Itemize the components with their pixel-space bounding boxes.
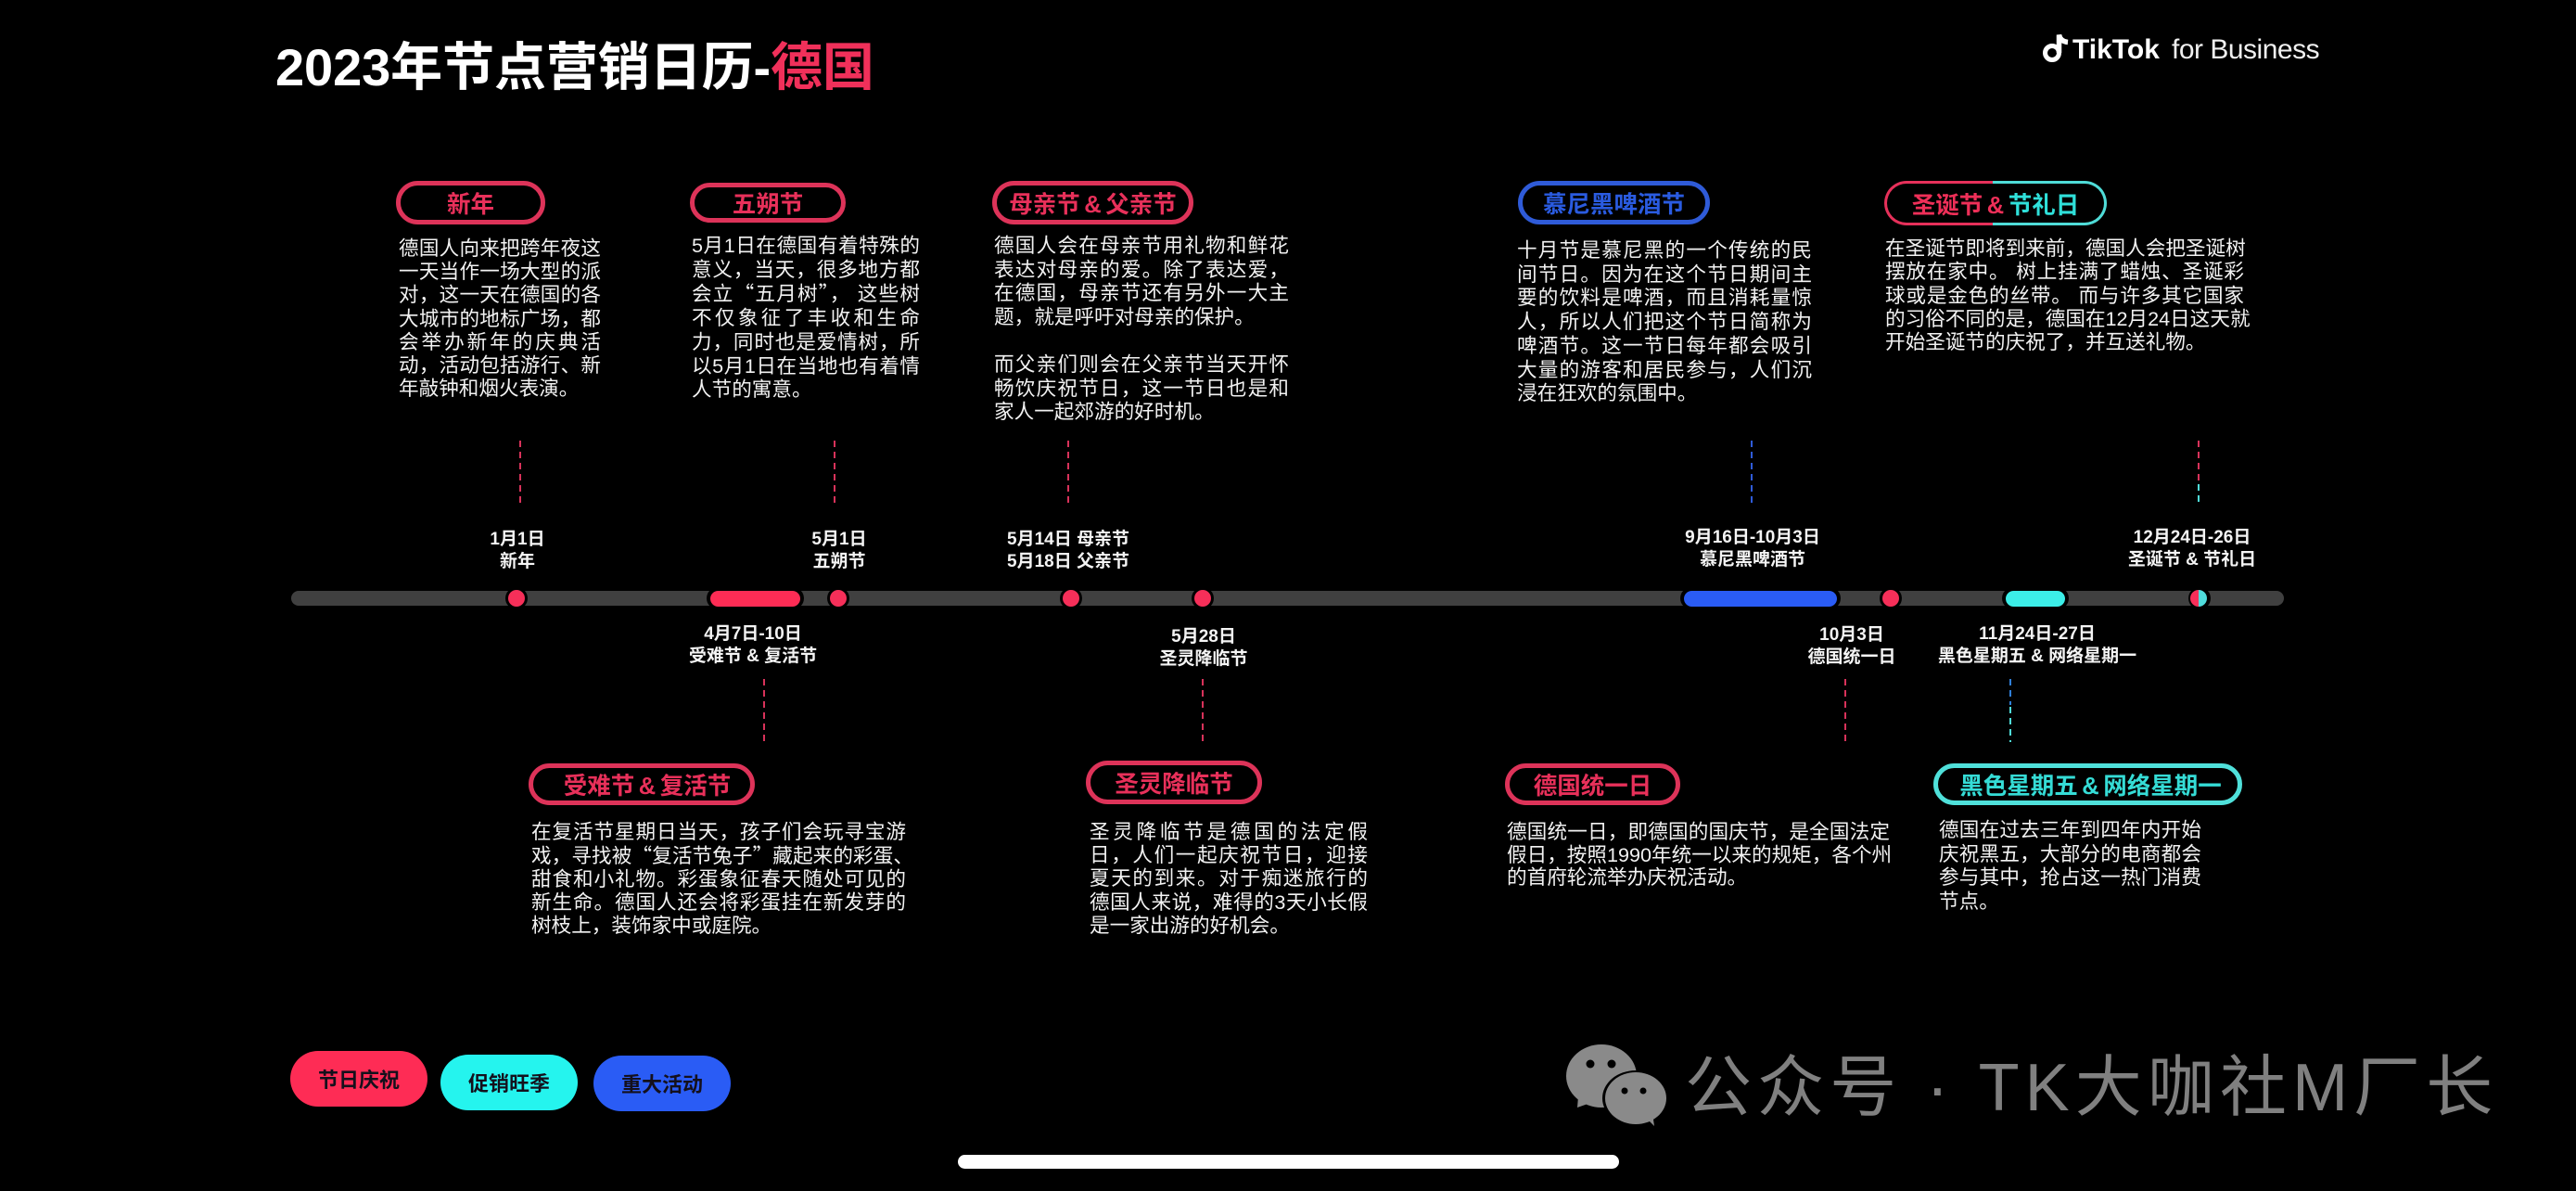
badge: 黑色星期五 & 网络星期一 [1933, 763, 2242, 805]
text: 五朔节 description: 5月1日在德国有着特殊的 [692, 234, 920, 257]
date label: 慕尼黑啤酒节 [1685, 528, 1820, 570]
connector: 德国统一日 [1844, 679, 1846, 742]
badge: 圣灵降临节: 圣灵降临节 [1115, 772, 1233, 798]
badge: 德国统一日: 德国统一日 [1534, 774, 1651, 800]
text: 母亲节 description: 在德国，母亲节还有另外一大主 [994, 281, 1289, 304]
connector: 五朔节 [834, 441, 835, 503]
legend: 促销旺季 [440, 1055, 578, 1110]
text: 圣灵降临节 description: 是一家出游的好机会。 [1090, 914, 1290, 937]
marker: 圣灵降临节 [1192, 587, 1214, 609]
text: 新年 description: 年敲钟和烟火表演。 [399, 377, 579, 400]
date label: 五朔节: 五朔节 [812, 552, 866, 571]
legend: 重大活动: 重大活动 [621, 1073, 703, 1096]
text: 圣灵降临节 description: 德国人来说，难得的3天小长假 [1090, 890, 1368, 914]
badge: 新年 [396, 181, 545, 224]
text: 慕尼黑啤酒节 description: 间节日。因为在这个节日期间主 [1517, 263, 1812, 286]
date label: 受难节 & 复活节 [689, 624, 817, 666]
date label: 圣诞节 & 节礼日: 12月24日-26日 [2134, 528, 2251, 547]
text: 新年 description [399, 237, 601, 400]
date label: 黑色星期五 & 网络星期一: 黑色星期五 & 网络星期一 [1938, 647, 2136, 666]
legend: 节日庆祝 [290, 1051, 427, 1107]
badge: 圣诞节 & 节礼日: 圣诞节 & [1912, 193, 2004, 219]
text: 五朔节 description: 力，同时也是爱情树，所 [692, 330, 920, 353]
text: 母亲节 description: 德国人会在母亲节用礼物和鲜花 [994, 234, 1289, 257]
text: 母亲节 description: 表达对母亲的爱。除了表达爱， [994, 258, 1289, 281]
legend: 促销旺季: 促销旺季 [468, 1072, 550, 1095]
badge: 新年: 新年 [447, 192, 494, 218]
badge: 慕尼黑啤酒节 [1518, 181, 1710, 224]
panel: 五朔节 [690, 183, 920, 401]
marker: 德国统一日 [1880, 587, 1902, 609]
legend [290, 1051, 731, 1111]
date label: 圣诞节 & 节礼日 [2128, 528, 2256, 570]
text: 圣诞节 description: 的习俗不同的是，德国在12月24日这天就 [1885, 307, 2251, 330]
badge: 慕尼黑啤酒节: 慕尼黑啤酒节 [1543, 192, 1685, 218]
panel: 德国统一日 [1505, 763, 1892, 889]
date label: 圣灵降临节: 圣灵降临节 [1159, 649, 1248, 669]
text: 母亲节 description: 题，就是呼吁对母亲的保护。 [994, 305, 1255, 328]
text: 德国统一日 description: 的首府轮流举办庆祝活动。 [1507, 865, 1747, 889]
panel: 慕尼黑啤酒节 [1517, 181, 1812, 404]
text: 圣诞节 description: 球或是金色的丝带。 而与许多其它国家 [1885, 284, 2244, 307]
text: 新年 description: 大城市的地标广场，都 [399, 307, 601, 330]
text: 慕尼黑啤酒节 description [1517, 238, 1812, 404]
connector: 黑色星期五 [2009, 679, 2011, 742]
text: 受难节 description [531, 820, 913, 937]
date label: 母亲节 & 父亲节: 5月18日 父亲节 [1007, 552, 1129, 571]
date label: 新年 [490, 530, 545, 571]
text: 德国统一日 description: 德国统一日，即德国的国庆节，是全国法定 [1507, 820, 1890, 843]
date label: 圣灵降临节: 5月28日 [1171, 627, 1236, 647]
marker: 黑色星期五 & 网络星期一 [2002, 587, 2069, 609]
text: 父亲节 description: 而父亲们则会在父亲节当天开怀 [994, 352, 1289, 376]
text: 圣诞节 description: 在圣诞节即将到来前，德国人会把圣诞树 [1885, 237, 2246, 260]
icon: WeChat bubbles [1566, 1044, 1666, 1126]
connector: 受难节 [763, 679, 765, 742]
date label: 德国统一日: 德国统一日 [1807, 647, 1896, 667]
date label: 新年: 1月1日 [490, 530, 545, 549]
date label: 黑色星期五 & 网络星期一 [1938, 624, 2136, 666]
text: 父亲节 description: 畅饮庆祝节日，这一节日也是和 [994, 377, 1289, 400]
text: 黑色星期五 description: 德国在过去三年到四年内开始 [1939, 818, 2201, 841]
panel: 母亲节 & 父亲节 [992, 181, 1289, 423]
timeline [291, 441, 2284, 742]
date label: 慕尼黑啤酒节: 9月16日-10月3日 [1685, 528, 1820, 547]
text: 德国统一日 description [1507, 820, 1892, 889]
text: 新年 description: 会举办新年的庆典活 [399, 330, 601, 353]
badge: 圣灵降临节 [1086, 761, 1262, 804]
text: 圣灵降临节 description: 日，人们一起庆祝节日，迎接 [1090, 843, 1368, 866]
text: 慕尼黑啤酒节 description: 啤酒节。这一节日每年都会吸引 [1517, 334, 1812, 357]
badge: 圣诞节 & 节礼日: 节礼日 [2009, 193, 2079, 219]
home indicator [958, 1155, 1619, 1169]
connector: 母亲节 [1067, 441, 1069, 503]
text: 新年 description: 一天当作一场大型的派 [399, 260, 601, 283]
text: 受难节 description: 甜食和小礼物。彩蛋象征春天随处可见的 [531, 867, 906, 890]
date label: 五朔节: 5月1日 [811, 530, 867, 549]
text: 黑色星期五 description: 参与其中，抢占这一热门消费 [1939, 865, 2201, 889]
connector: 圣灵降临节 [1202, 679, 1204, 742]
legend: 节日庆祝: 节日庆祝 [318, 1069, 400, 1092]
date label: 新年: 新年 [500, 552, 535, 571]
text: 母亲节 description [994, 234, 1289, 328]
text: 受难节 description: 戏，寻找被“复活节兔子”藏起来的彩蛋、 [531, 840, 913, 869]
text: 慕尼黑啤酒节 description: 大量的游客和居民参与，人们沉 [1517, 358, 1812, 381]
text: 慕尼黑啤酒节 description: 十月节是慕尼黑的一个传统的民 [1517, 238, 1812, 262]
text: 慕尼黑啤酒节 description: 人，所以人们把这个节日简称为 [1517, 310, 1812, 333]
date label: 母亲节 & 父亲节: 5月14日 母亲节 [1007, 530, 1129, 549]
text: 慕尼黑啤酒节 description: 浸在狂欢的氛围中。 [1517, 381, 1697, 404]
connector: 慕尼黑啤酒节 [1751, 441, 1753, 503]
panel: 圣灵降临节 [1086, 761, 1368, 937]
logo: TikTok for Business: for Business [2172, 34, 2319, 65]
date label: 德国统一日: 10月3日 [1819, 625, 1884, 645]
logo: TikTok for Business [2043, 34, 2319, 65]
date label: 德国统一日 [1807, 625, 1896, 667]
badge: 圣诞节 & 节礼日 [1884, 181, 2107, 225]
legend: 重大活动 [593, 1056, 731, 1111]
badge: 五朔节: 五朔节 [733, 192, 803, 218]
text: 五朔节 description: 意义，当天，很多地方都 [692, 258, 920, 281]
panel: 受难节 & 复活节 [529, 763, 913, 937]
text: 五朔节 description [692, 234, 920, 401]
text: 黑色星期五 description: 庆祝黑五，大部分的电商都会 [1939, 842, 2201, 865]
text: 父亲节 description [994, 352, 1289, 423]
date label: 圣灵降临节 [1159, 627, 1248, 669]
connector: 圣诞节 [2198, 441, 2200, 503]
panel: 新年 [396, 181, 601, 400]
date label: 五朔节 [811, 530, 867, 571]
text: 圣灵降临节 description: 夏天的到来。对于痴迷旅行的 [1090, 866, 1368, 890]
marker: 新年 [505, 587, 528, 609]
text: 五朔节 description: 人节的寓意。 [692, 378, 812, 401]
badge: 母亲节 & 父亲节 [992, 181, 1193, 224]
date label: 受难节 & 复活节: 受难节 & 复活节 [689, 647, 817, 666]
connector: 新年 [519, 441, 521, 503]
text: 父亲节 description: 家人一起郊游的好时机。 [994, 400, 1215, 423]
badge: 五朔节 [690, 183, 846, 223]
text: 德国统一日 description: 假日，按照1990年统一以来的规矩，各个州 [1507, 843, 1892, 866]
text: 圣灵降临节 description: 圣灵降临节是德国的法定假 [1090, 820, 1368, 843]
marker: 圣诞节 & 节礼日 [2188, 587, 2211, 609]
text: 新年 description: 德国人向来把跨年夜这 [399, 237, 601, 260]
text: 圣诞节 description: 开始圣诞节的庆祝了，并互送礼物。 [1885, 330, 2206, 353]
date label: 慕尼黑啤酒节: 慕尼黑啤酒节 [1700, 550, 1805, 570]
watermark text: 公众号 · TK大咖社M厂长 [1685, 1051, 2498, 1125]
date label: 受难节 & 复活节: 4月7日-10日 [704, 624, 802, 644]
marker: 慕尼黑啤酒节 [1680, 587, 1841, 609]
text: 新年 description: 对，这一天在德国的各 [399, 283, 601, 306]
watermark [1566, 1044, 2498, 1126]
text: 新年 description: 动，活动包括游行、新 [399, 353, 601, 377]
text: 圣诞节 description [1885, 237, 2251, 353]
text: 五朔节 description: 以5月1日在当地也有着情 [692, 354, 920, 378]
text: 五朔节 description: 不仅象征了丰收和生命 [692, 306, 920, 329]
marker: 受难节 & 复活节 [707, 587, 804, 609]
text: 慕尼黑啤酒节 description: 要的饮料是啤酒，而且消耗量惊 [1517, 286, 1812, 309]
marker: 五朔节 [827, 587, 849, 609]
panel: 圣诞节 & 节礼日 [1884, 181, 2251, 353]
text: 圣诞节 description: 摆放在家中。 树上挂满了蜡烛、圣诞彩 [1885, 260, 2244, 283]
text: 黑色星期五 description [1939, 818, 2201, 913]
panel: 黑色星期五 & 网络星期一 [1933, 763, 2242, 913]
text: 受难节 description: 在复活节星期日当天，孩子们会玩寻宝游 [531, 820, 906, 843]
badge: 德国统一日 [1505, 763, 1680, 805]
text: 受难节 description: 树枝上，装饰家中或庭院。 [531, 914, 772, 937]
title: 2023年节点营销日历-德国 [275, 38, 874, 96]
badge: 受难节 & 复活节: 受难节 & 复活节 [564, 774, 731, 800]
timeline bar [291, 591, 2284, 606]
badge: 黑色星期五 & 网络星期一: 黑色星期五 & 网络星期一 [1959, 774, 2222, 800]
date label: 圣诞节 & 节礼日: 圣诞节 & 节礼日 [2128, 550, 2256, 570]
logo: TikTok for Business: TikTok [2072, 34, 2160, 65]
text: 黑色星期五 description: 节点。 [1939, 890, 1999, 913]
badge: 受难节 & 复活节 [529, 763, 755, 805]
text: 圣灵降临节 description [1090, 820, 1368, 937]
text: 五朔节 description: 会立“五月树”， 这些树 [692, 278, 920, 307]
date label: 母亲节 & 父亲节 [1007, 529, 1129, 571]
date label: 黑色星期五 & 网络星期一: 11月24日-27日 [1979, 624, 2096, 644]
marker: 母亲节 & 父亲节 [1060, 587, 1082, 609]
badge: 母亲节 & 父亲节: 母亲节 & 父亲节 [1009, 192, 1177, 218]
text: 受难节 description: 新生命。德国人还会将彩蛋挂在新发芽的 [531, 890, 906, 914]
